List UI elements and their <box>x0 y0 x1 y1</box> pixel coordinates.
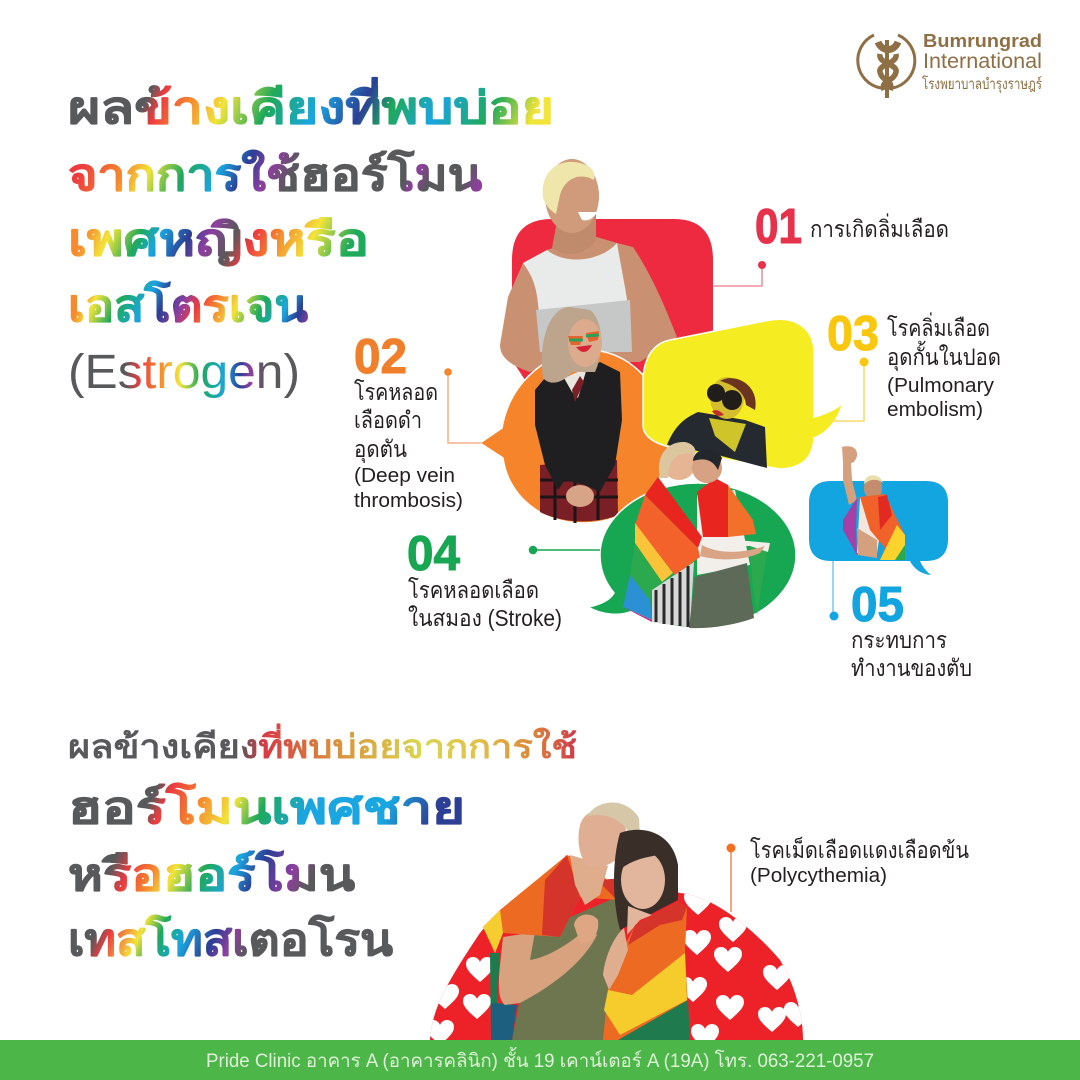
left person <box>483 802 640 1040</box>
connector 03 <box>832 358 868 421</box>
label 04: โรคหลอดเลือด <box>408 577 539 603</box>
woman figure <box>535 307 622 523</box>
title line 2: จากการใช้ฮอร์โมน <box>68 148 482 200</box>
person figure <box>667 377 767 468</box>
label 04 <box>408 577 562 631</box>
title line 5: (Estrogen) <box>68 346 300 399</box>
label 02: thrombosis) <box>354 489 463 512</box>
title line 4: เอสโตรเจน <box>68 279 308 331</box>
label 02: โรคหลอด <box>354 379 438 405</box>
label 02: เลือดดำ <box>354 407 422 433</box>
logo thai name: โรงพยาบาลบำรุงราษฎร์ <box>922 75 1042 94</box>
couple wrapped in pride flag <box>483 802 690 1040</box>
label 03: อุดกั้นในปอด <box>887 341 1001 371</box>
label 03 <box>887 312 1001 421</box>
person figure <box>842 446 905 560</box>
connector 04 <box>529 546 600 554</box>
title: side effects of estrogen <box>68 77 554 399</box>
bubble 03: yellow with person in sunglasses <box>643 319 843 469</box>
red dome with white hearts <box>430 892 803 1040</box>
bubble 05: blue with person raising fist <box>809 446 948 575</box>
label 02: (Deep vein <box>354 464 455 487</box>
label 02: อุดตัน <box>354 436 407 463</box>
title line 3: เพศหญิงหรือ <box>68 216 369 266</box>
yellow speech bubble <box>643 319 843 469</box>
logo: Bumrungrad International <box>858 31 1042 98</box>
label 01: การเกิดลิ่มเลือด <box>810 213 949 242</box>
bubble 02: orange with woman in leather jacket <box>480 307 668 523</box>
bubble 04: green with couple under flag <box>588 442 796 628</box>
red speech bubble <box>512 219 713 380</box>
title: side effects of testosterone <box>68 723 577 965</box>
number 02: 02 <box>354 330 407 384</box>
man figure <box>500 159 677 372</box>
label 03: embolism) <box>887 398 983 421</box>
blue speech bubble <box>809 481 948 575</box>
number 04: 04 <box>407 527 460 581</box>
footer bar <box>0 1040 1080 1080</box>
label 03: โรคลิ่มเลือด <box>887 312 990 341</box>
number 03: 03 <box>827 307 879 361</box>
number 05: 05 <box>851 578 904 632</box>
orange speech bubble <box>480 350 668 523</box>
logo subtitle: International <box>923 50 1042 73</box>
right person <box>603 830 690 1040</box>
label 05 <box>851 627 972 681</box>
bubble 01: red with man in tank top <box>500 159 713 380</box>
logo name: Bumrungrad <box>923 31 1042 51</box>
second title line 1: ผลข้างเคียงที่พบบ่อยจากการใช้ <box>68 723 577 765</box>
second title line 3: หรือฮอร์โมน <box>68 848 355 900</box>
label 02 <box>354 379 463 512</box>
connector 01 <box>714 261 766 286</box>
label polycythemia: โรคเม็ดเลือดแดงเลือดข้น <box>750 835 969 863</box>
label 04: ในสมอง (Stroke) <box>408 605 562 631</box>
couple figure <box>623 442 770 628</box>
second title line 4: เทสโทสเตอโรน <box>68 913 393 965</box>
connector 05 <box>830 561 838 620</box>
connector 02 <box>444 368 481 443</box>
second title line 2: ฮอร์โมนเพศชาย <box>68 781 465 833</box>
number 01: 01 <box>755 200 802 254</box>
icon: caduceus emblem <box>858 35 915 98</box>
label 05: กระทบการ <box>851 627 947 653</box>
connector polycythemia <box>726 844 736 912</box>
green speech bubble <box>588 483 796 628</box>
label polycythemia: (Polycythemia) <box>750 864 887 887</box>
label 05: ทำงานของตับ <box>851 655 972 681</box>
label 03: (Pulmonary <box>887 374 995 397</box>
label polycythemia <box>750 835 969 887</box>
title line 1: ผลข้างเคียงที่พบบ่อย <box>68 77 554 133</box>
footer text: Pride Clinic อาคาร A (อาคารคลินิก) ชั้น 19 เคาน์เตอร์ A (19A) โทร. 063-221-0957 <box>206 1047 874 1072</box>
